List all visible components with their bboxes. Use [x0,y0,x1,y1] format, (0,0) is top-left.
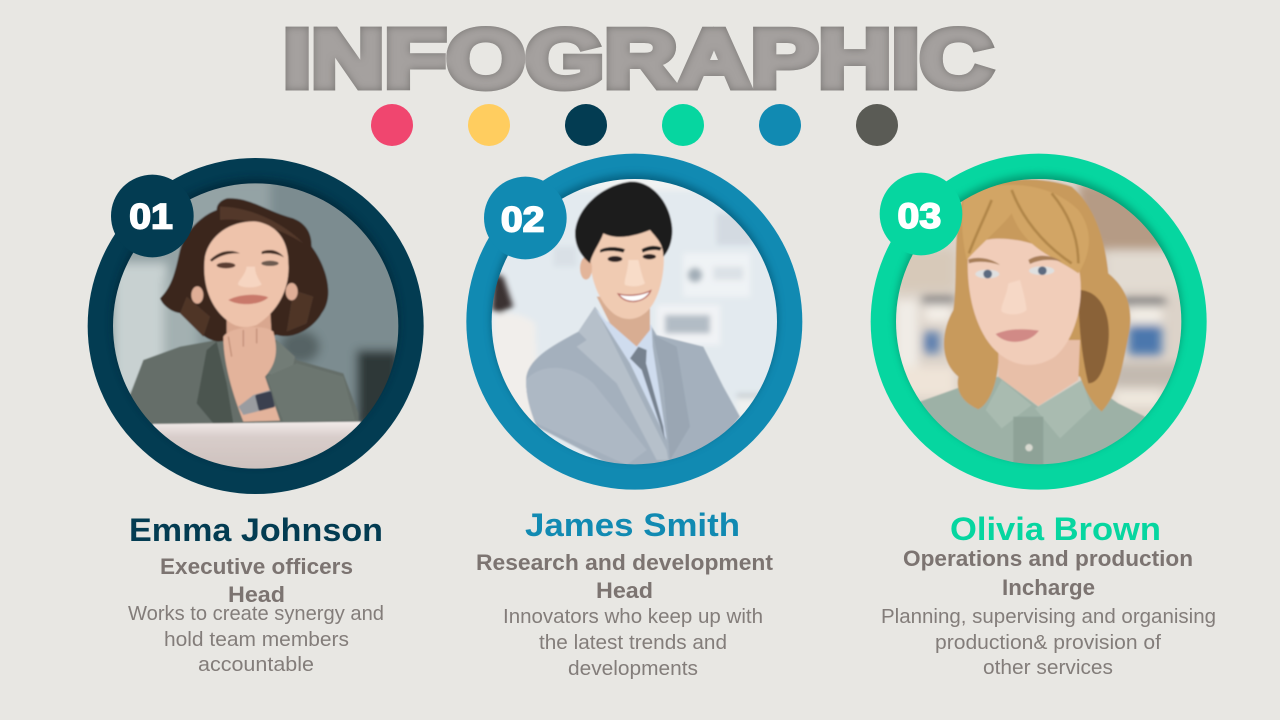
badge 2: 02 [501,199,544,239]
text block: Olivia Brown [881,511,1216,679]
ring shadow 2 [491,174,778,461]
description: accountable [198,654,314,676]
portrait 1: Emma Johnson [88,158,424,494]
brows, eyes, nose, mouth [210,251,240,262]
badge 1 [111,175,194,257]
role [160,554,353,607]
neck [226,313,272,334]
brows, eyes, nose, mouth [600,247,625,253]
shirt [129,340,358,425]
description: hold team members [164,629,349,651]
description: developments [568,658,698,680]
description: other services [983,657,1113,679]
description [881,606,1216,679]
badge 1: 01 [129,197,173,236]
description: Planning, supervising and organising [881,606,1216,628]
watch [238,390,275,415]
colour dot row [371,104,898,146]
shirt [915,377,1145,470]
ring shadow 3 [895,174,1182,461]
description [128,603,384,676]
text block: Emma Johnson [128,512,384,676]
description: the latest trends and [539,632,727,654]
description: Innovators who keep up with [503,606,763,628]
badge 3: 03 [898,196,941,236]
fringe [962,185,1089,273]
name: Emma Johnson [129,512,383,548]
role [903,546,1193,600]
hair [575,182,672,263]
hand and arm [223,327,280,422]
face [968,239,1081,365]
badge 2 [484,177,567,259]
laptop [152,420,362,469]
name: Olivia Brown [950,511,1161,547]
photo 1 [110,180,403,483]
role: Operations and production [903,546,1193,571]
brows, eyes, nose, mouth [968,258,1000,265]
name: James Smith [525,507,740,543]
ring 2 [466,154,802,490]
hair back [160,198,328,342]
role: Research and development [476,550,774,575]
description: production& provision of [935,632,1161,654]
face [590,227,664,319]
portrait 3: Olivia Brown [871,154,1207,490]
description [503,606,763,680]
role: Head [596,578,653,603]
role: Executive officers [160,554,353,579]
photo 3 [895,177,1188,470]
portrait 2: James Smith [466,154,802,490]
ring 3 [871,154,1207,490]
photo 2 [490,177,783,470]
title: INFOGRAPHIC [283,12,993,105]
text block: James Smith [476,507,774,680]
hair back [944,179,1130,412]
badge 3 [880,173,962,255]
shirt and tie [595,308,667,440]
role: Incharge [1002,575,1095,600]
role: Head [228,582,285,607]
description: Works to create synergy and [128,603,384,625]
neck [998,340,1080,406]
ring 1 [88,158,424,494]
face [204,222,289,327]
role [476,550,774,603]
ring shadow 1 [112,179,399,465]
suit [526,307,740,470]
neck [597,297,650,347]
